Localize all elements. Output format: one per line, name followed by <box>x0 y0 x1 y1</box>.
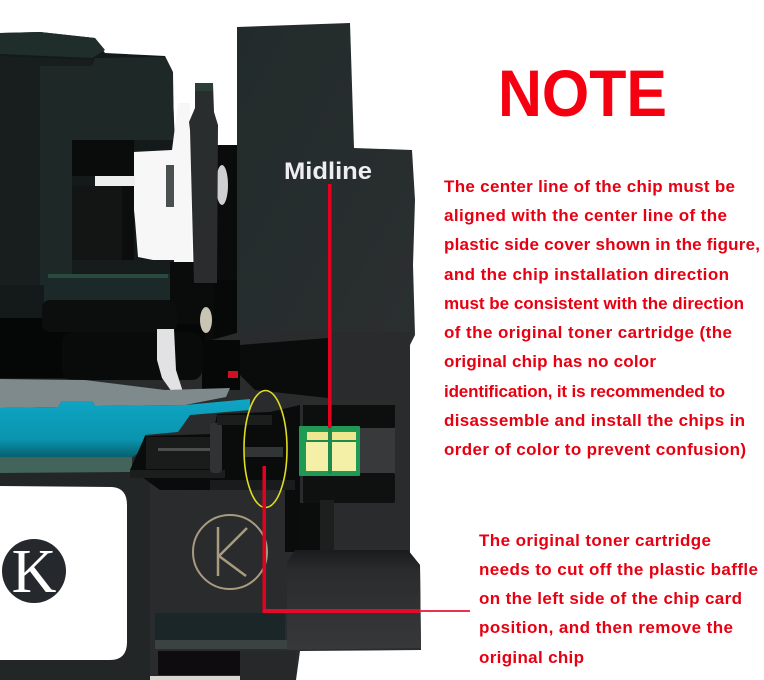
text block: centre line note: identification, it is recommended to <box>444 382 725 401</box>
text block: centre line note: aligned with the center line of the <box>444 206 727 225</box>
chip slot structure <box>130 400 395 552</box>
text block: centre line note: disassemble and install the chips in <box>444 411 745 430</box>
lower right block <box>287 550 421 650</box>
text block: baffle note: needs to cut off the plastic baffle <box>479 560 758 579</box>
text block: centre line note: order of color to prevent confusion) <box>444 440 746 459</box>
text block: centre line note: must be consistent with the direction <box>444 294 744 313</box>
text block: centre line note: plastic side cover shown in the figure, <box>444 235 760 254</box>
text block: baffle note: on the left side of the chip card <box>479 589 742 608</box>
chip <box>299 426 360 476</box>
K emblem block <box>158 490 285 608</box>
grey green strip <box>0 457 132 473</box>
red leader line to lower note <box>262 466 470 613</box>
text block: centre line note: The center line of the chip must be <box>444 177 735 196</box>
title: NOTE: NOTE <box>498 56 667 130</box>
white gear <box>72 103 216 324</box>
text block: baffle note: original chip <box>479 648 584 667</box>
white label <box>0 486 127 660</box>
label K badge: K <box>12 538 57 606</box>
bottom bars <box>150 613 296 680</box>
centre plate <box>189 83 238 345</box>
right side cover <box>237 23 415 345</box>
text block: centre line note: of the original toner cartridge (the <box>444 323 732 342</box>
text block: baffle note <box>479 531 758 667</box>
label K badge <box>2 538 66 606</box>
text block: baffle note: position, and then remove the <box>479 618 733 637</box>
cartridge upper left housing <box>0 32 240 400</box>
yellow ellipse marker <box>244 390 287 508</box>
frame around label <box>0 472 150 680</box>
text block: centre line note: and the chip installation direction <box>444 265 729 284</box>
teal roller <box>0 399 250 457</box>
text block: baffle note: The original toner cartridge <box>479 531 711 550</box>
text block: centre line note <box>444 177 760 459</box>
text block: centre line note: original chip has no color <box>444 352 656 371</box>
lower cartridge body <box>0 332 421 680</box>
midline label: Midline <box>284 158 372 185</box>
grey band <box>0 379 230 408</box>
midline red line <box>328 184 332 428</box>
roller with white ring <box>42 300 328 398</box>
photo: toner cartridge <box>0 23 421 680</box>
